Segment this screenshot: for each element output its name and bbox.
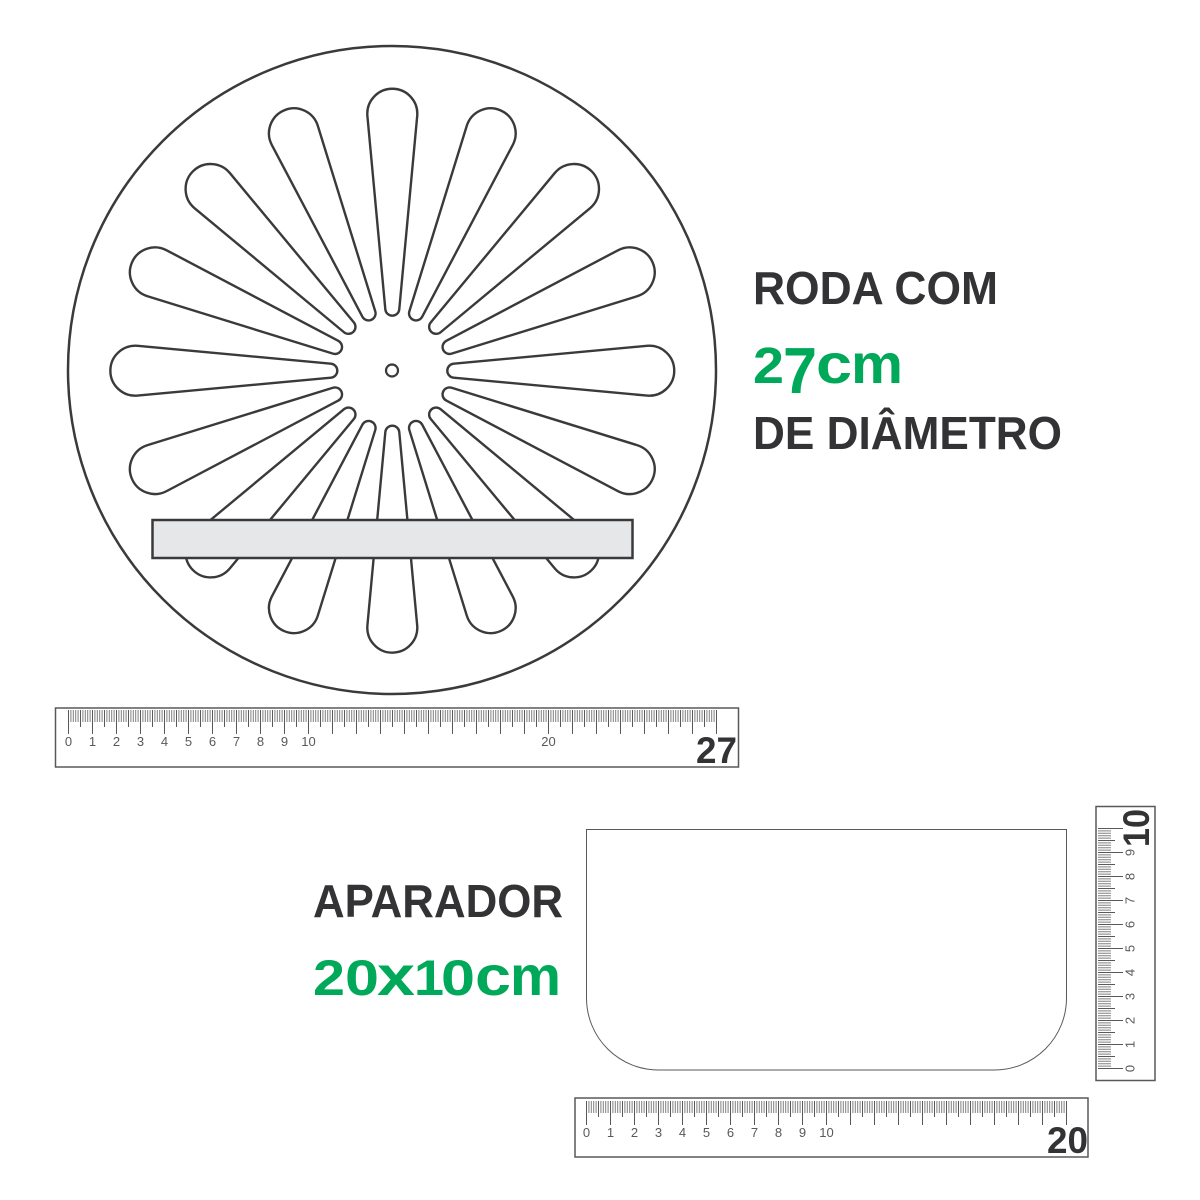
heading: wheel diameter: 7: [783, 334, 817, 407]
heading: trimmer size: c: [475, 944, 511, 1007]
heading: trimmer size: x: [377, 944, 415, 1007]
ruler: 27 cm: 0: [65, 734, 72, 749]
ruler: 27 cm: 9: [281, 734, 288, 749]
ruler: 10 cm vertical: 9: [1122, 849, 1138, 856]
heading: trimmer size: m: [510, 944, 561, 1007]
ruler: 20 cm: [575, 1098, 1088, 1161]
heading: wheel diameter: RODA COM: [753, 262, 998, 314]
heading: trimmer size: [313, 875, 563, 1007]
wheel centre hole: [386, 364, 398, 376]
ruler: 10 cm vertical: 6: [1122, 921, 1138, 928]
ruler: 27 cm: 5: [185, 734, 192, 749]
ruler: 27 cm: 4: [161, 734, 168, 749]
trimmer outline: [586, 830, 1066, 1070]
ruler: 27 cm: [56, 708, 738, 771]
heading: trimmer size: APARADOR: [313, 875, 563, 927]
ruler: 10 cm vertical: 3: [1122, 993, 1138, 1000]
ruler: 10 cm vertical: 10: [1116, 809, 1157, 847]
ruler: 10 cm vertical: 2: [1122, 1017, 1138, 1024]
ruler: 10 cm vertical: 5: [1122, 945, 1138, 952]
heading: trimmer size: 2: [313, 950, 345, 1006]
ruler: 27 cm: 2: [113, 734, 120, 749]
ruler: 27 cm: 7: [233, 734, 240, 749]
ruler: 20 cm: 8: [775, 1125, 782, 1140]
ruler: 10 cm vertical: 0: [1122, 1065, 1138, 1072]
ruler: 20 cm: 6: [727, 1125, 734, 1140]
ruler: 20 cm: 9: [799, 1125, 806, 1140]
ruler: 10 cm vertical: 4: [1122, 969, 1138, 976]
ruler: 20 cm: 1: [607, 1125, 614, 1140]
heading: wheel diameter: 2: [753, 337, 784, 394]
ruler: 20 cm: 7: [751, 1125, 758, 1140]
ruler: 27 cm: 6: [209, 734, 216, 749]
ruler: 20 cm: 2: [631, 1125, 638, 1140]
ruler: 20 cm: 10: [819, 1125, 834, 1140]
wheel diagram: [68, 46, 716, 694]
ruler: 10 cm vertical: [1096, 806, 1157, 1080]
ruler: 10 cm vertical: 8: [1122, 873, 1138, 880]
ruler: 10 cm vertical: 1: [1122, 1041, 1138, 1048]
ruler: 27 cm: 27: [696, 730, 737, 771]
heading: trimmer size: 0: [345, 950, 379, 1006]
ruler: 27 cm: 10: [301, 734, 316, 749]
heading: trimmer size: 0: [441, 950, 475, 1006]
wheel petal slots: [110, 89, 674, 653]
heading: wheel diameter: DE DIÂMETRO: [753, 407, 1062, 459]
ruler: 20 cm: 0: [583, 1125, 590, 1140]
ruler: 20 cm: 5: [703, 1125, 710, 1140]
heading: trimmer size: 1: [414, 950, 444, 1006]
heading: wheel diameter: [753, 262, 1062, 459]
ruler: 20 cm: 20: [1047, 1120, 1088, 1161]
wheel outer circle: [68, 46, 716, 694]
grey bar across wheel: [152, 520, 632, 558]
ruler: 20 cm: 3: [655, 1125, 662, 1140]
ruler: 27 cm: 3: [137, 734, 144, 749]
ruler: 27 cm: 20: [541, 734, 556, 749]
heading: wheel diameter: c: [816, 332, 852, 395]
ruler: 27 cm: 1: [89, 734, 96, 749]
heading: wheel diameter: m: [851, 332, 903, 395]
ruler: 27 cm: 8: [257, 734, 264, 749]
ruler: 10 cm vertical: 7: [1122, 897, 1138, 904]
ruler: 20 cm: 4: [679, 1125, 686, 1140]
